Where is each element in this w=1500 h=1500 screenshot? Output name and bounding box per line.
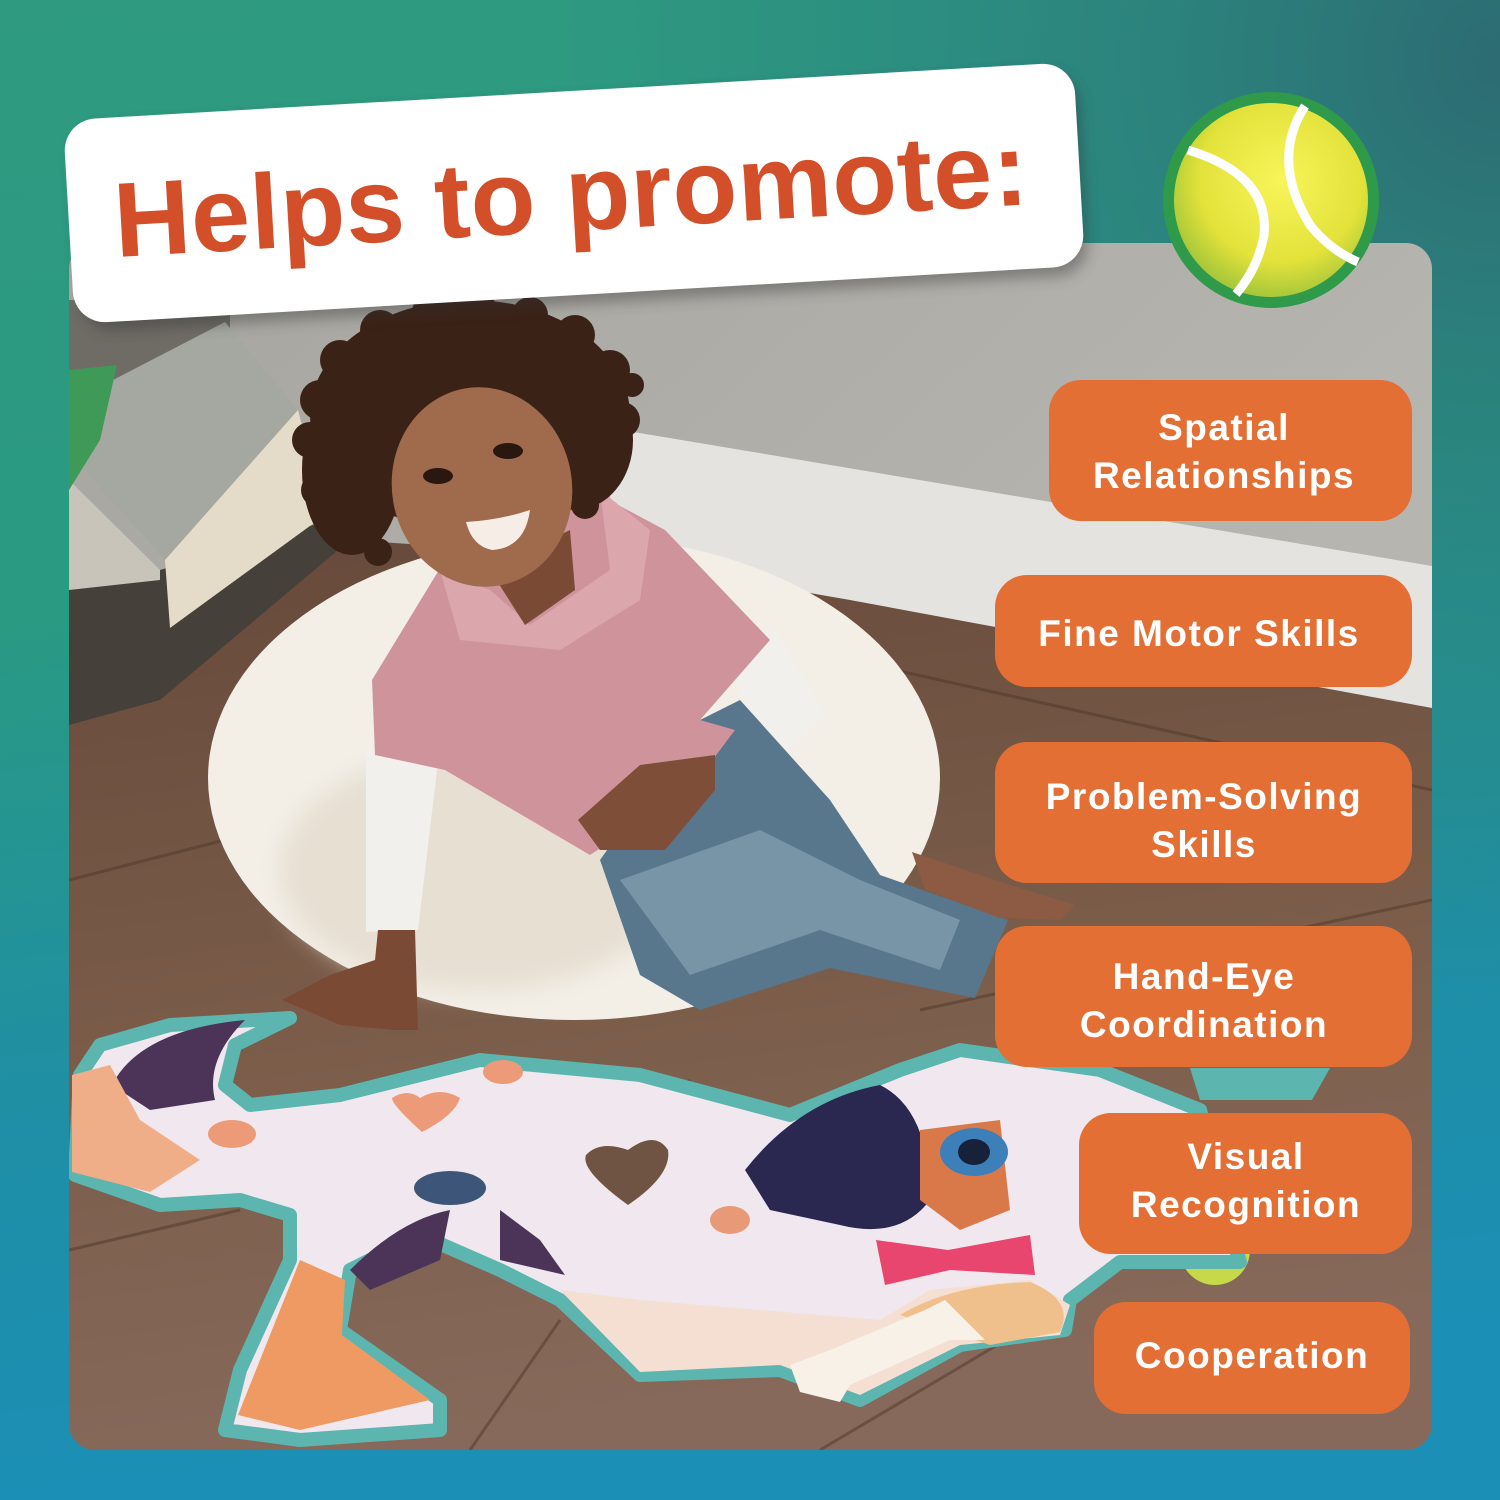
couch and blanket bbox=[69, 300, 350, 725]
dog eye bbox=[940, 1128, 1008, 1176]
wall bbox=[69, 243, 1432, 570]
skill label: Fine Motor Skills bbox=[995, 575, 1412, 687]
skill label: Hand-Eye Coordination bbox=[995, 926, 1412, 1067]
skill label: Spatial Relationships bbox=[1049, 380, 1412, 521]
eye patch bbox=[920, 1120, 1010, 1230]
skill label: Problem-Solving Skills bbox=[995, 742, 1412, 883]
baseboard bbox=[610, 428, 1432, 708]
heart cutout bbox=[585, 1140, 668, 1205]
front leg bbox=[560, 1280, 1070, 1395]
smile bbox=[466, 510, 530, 550]
skill label: Hand-Eye Coordination: Hand-Eye bbox=[1113, 956, 1295, 997]
title card bbox=[63, 62, 1090, 332]
hair bbox=[292, 292, 644, 566]
tail dark patch bbox=[112, 1020, 245, 1110]
skill label: Spatial Relationships: Spatial bbox=[1158, 407, 1290, 448]
bone bbox=[790, 1300, 985, 1402]
forearm hand bbox=[578, 755, 715, 850]
skill label: Visual Recognition: Recognition bbox=[1131, 1184, 1361, 1225]
paw bbox=[900, 1282, 1064, 1345]
child bbox=[282, 292, 1075, 1030]
floor board lines bbox=[69, 660, 1432, 1450]
foot bbox=[912, 852, 1075, 920]
tennis ball icon bbox=[1163, 92, 1379, 308]
back leg orange bbox=[238, 1260, 430, 1430]
skill label: Problem-Solving Skills: Problem-Solving bbox=[1046, 776, 1362, 817]
skill label: Hand-Eye Coordination: Coordination bbox=[1080, 1004, 1328, 1045]
silhouette bbox=[75, 1018, 1240, 1440]
skill label: Problem-Solving Skills: Skills bbox=[1151, 824, 1257, 865]
skill label: Spatial Relationships: Relationships bbox=[1093, 455, 1355, 496]
skill label: Cooperation: Cooperation bbox=[1135, 1335, 1369, 1376]
dog ear bbox=[745, 1085, 930, 1229]
right sleeve bbox=[680, 630, 825, 810]
eyes bbox=[423, 468, 453, 484]
collar bbox=[440, 490, 650, 650]
title text: Helps to promote: bbox=[111, 109, 1031, 280]
leg dark patch bbox=[350, 1210, 450, 1290]
photo panel bbox=[69, 243, 1432, 1450]
floor bbox=[69, 540, 1432, 1450]
hand on floor bbox=[282, 930, 418, 1030]
skill label: Visual Recognition: Visual bbox=[1187, 1136, 1305, 1177]
face bbox=[392, 387, 572, 587]
neck bbox=[500, 530, 575, 625]
tail orange bbox=[72, 1065, 200, 1192]
skill label: Visual Recognition bbox=[1079, 1113, 1412, 1254]
loose puzzle piece bbox=[1190, 1068, 1330, 1100]
puzzle dog bbox=[72, 1018, 1240, 1440]
bow bbox=[876, 1235, 1035, 1285]
spots bbox=[392, 1092, 460, 1132]
back arm sleeve bbox=[366, 745, 440, 932]
skill label: Cooperation bbox=[1094, 1302, 1410, 1414]
skill label: Fine Motor Skills: Fine Motor Skills bbox=[1038, 613, 1360, 654]
shirt bbox=[372, 490, 770, 855]
tennis ball on puzzle bbox=[1186, 1254, 1250, 1285]
jeans bbox=[600, 700, 1008, 1010]
cushion bbox=[208, 536, 940, 1020]
